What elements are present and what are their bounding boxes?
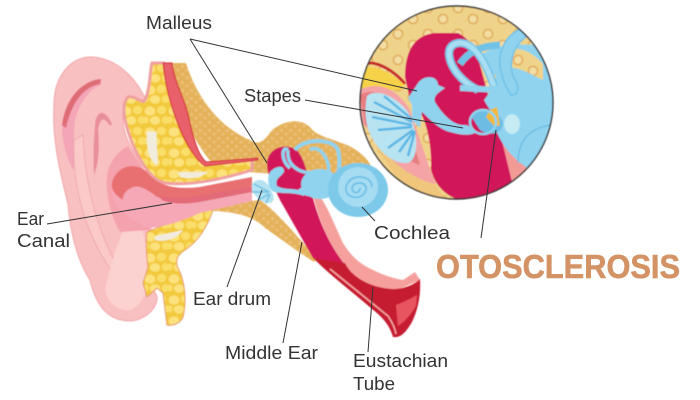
eardrum xyxy=(366,93,416,163)
pink strip xyxy=(312,192,420,291)
upper bone xyxy=(170,63,372,178)
fat tissue lower xyxy=(143,197,250,325)
cochlea spiral xyxy=(328,163,388,217)
label: malleus: Malleus xyxy=(146,13,212,33)
white patches xyxy=(147,131,208,178)
magnified view circle xyxy=(355,0,560,205)
ear canal xyxy=(112,166,252,228)
inner ear blue xyxy=(476,45,553,170)
oval window with otosclerosis lesion xyxy=(471,110,503,134)
canal tissue xyxy=(360,86,432,176)
ossicles xyxy=(268,167,307,196)
cochlea and semicircular canals xyxy=(252,141,388,217)
leader lines xyxy=(47,39,496,352)
eustachian tube xyxy=(313,258,420,337)
ossicles malleus incus stapes xyxy=(408,77,475,135)
pink strip xyxy=(502,143,527,182)
fat tissue upper xyxy=(124,63,252,184)
ear lobe xyxy=(106,219,148,310)
red muscle strand xyxy=(360,63,405,84)
outer ear xyxy=(54,57,157,321)
semicircular loop xyxy=(460,45,500,64)
label: ear canal: Ear xyxy=(17,209,44,229)
muscle xyxy=(163,63,258,166)
crimson cavity xyxy=(405,33,514,199)
middle ear cavity xyxy=(267,146,345,265)
semicircular canal hanging loop xyxy=(500,28,530,95)
label: eustachian tube: Tube xyxy=(353,374,395,394)
lower bone xyxy=(213,200,318,262)
label: stapes: Stapes xyxy=(244,86,301,106)
tan patch behind the canals xyxy=(506,49,543,80)
label: eustachian tube: Eustachian xyxy=(353,351,448,371)
anatomy illustration xyxy=(54,0,560,337)
title: OTOSCLEROSIS xyxy=(436,248,680,285)
concha xyxy=(107,146,150,232)
label: middle ear: Middle Ear xyxy=(225,343,318,363)
label: cochlea: Cochlea xyxy=(374,223,451,243)
eardrum xyxy=(252,180,274,203)
label: ear drum: Ear drum xyxy=(193,289,271,309)
label: ear canal: Canal xyxy=(17,231,70,251)
